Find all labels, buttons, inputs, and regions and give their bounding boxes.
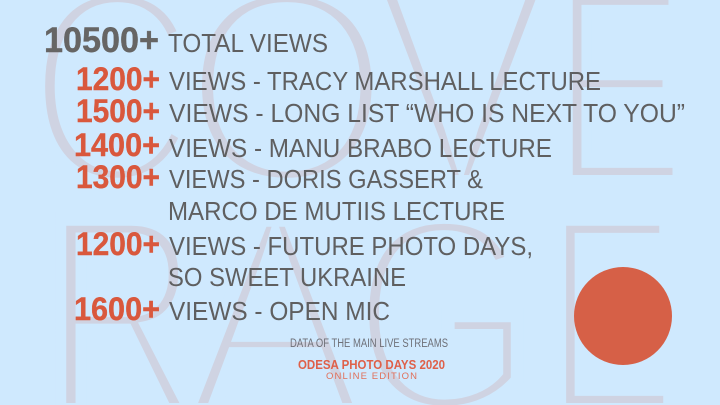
row: Future Photo Days, So Sweet Ukraine: 1200+ (76, 226, 160, 262)
row: open mic: VIEWS - OPEN MIC (169, 298, 390, 326)
row: Tracy Marshall lecture: VIEWS - TRACY MARSHALL LECTURE (169, 68, 601, 96)
total views row (44, 21, 328, 60)
row: Manu Brabo lecture (74, 127, 552, 163)
row: Future Photo Days, So Sweet Ukraine: SO SWEET UKRAINE (168, 264, 406, 292)
row: long list: VIEWS - LONG LIST “WHO IS NEXT TO YOU” (169, 100, 685, 128)
row: Doris Gassert and Marco De Mutiis lecture: VIEWS - DORIS GASSERT & (169, 166, 483, 194)
data source note: DATA OF THE MAIN LIVE STREAMS (290, 338, 448, 350)
event name: ODESA PHOTO DAYS 2020 (298, 358, 445, 372)
row: Tracy Marshall lecture (76, 61, 601, 97)
row: Doris Gassert and Marco De Mutiis lecture (76, 159, 505, 226)
decorative red circle (574, 267, 672, 365)
total views row: 10500+ (44, 21, 159, 60)
row: Future Photo Days, So Sweet Ukraine: VIEWS - FUTURE PHOTO DAYS, (169, 233, 533, 261)
row: Manu Brabo lecture: VIEWS - MANU BRABO LECTURE (169, 135, 552, 163)
row: open mic: 1600+ (74, 291, 160, 327)
row: Doris Gassert and Marco De Mutiis lecture: MARCO DE MUTIIS LECTURE (168, 198, 505, 226)
row: open mic (74, 291, 390, 327)
event edition: ONLINE EDITION (326, 371, 417, 382)
row: Future Photo Days, So Sweet Ukraine (76, 226, 533, 292)
row: long list (76, 93, 685, 129)
total views row: TOTAL VIEWS (168, 30, 328, 58)
row: long list: 1500+ (76, 93, 160, 129)
row: Tracy Marshall lecture: 1200+ (76, 61, 160, 97)
row: Doris Gassert and Marco De Mutiis lecture: 1300+ (76, 159, 160, 195)
row: Manu Brabo lecture: 1400+ (74, 127, 160, 163)
